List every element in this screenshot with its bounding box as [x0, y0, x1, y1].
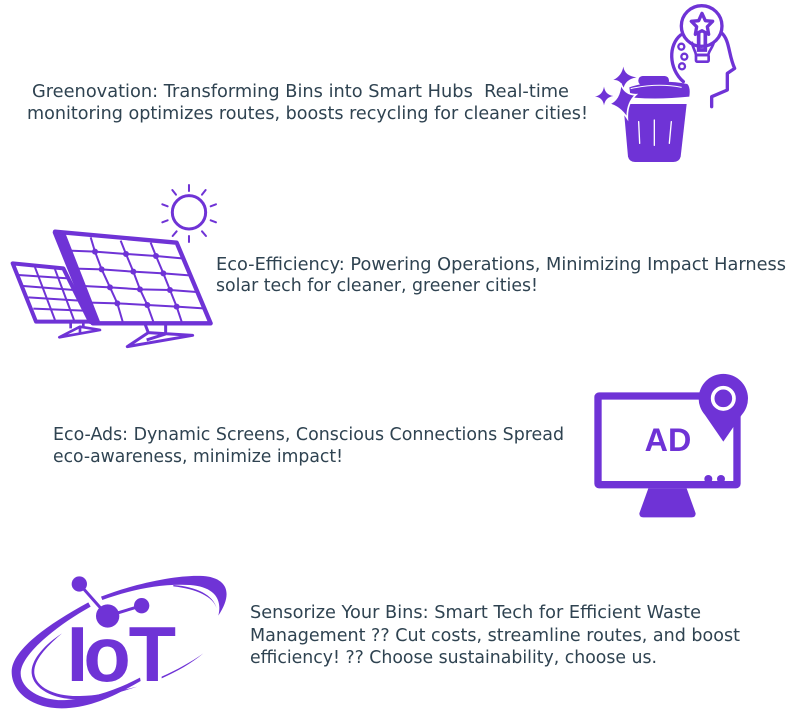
text block: Sensorize Your Bins	[250, 602, 740, 668]
text block: Eco-Efficiency: solar tech for cleaner, greener cities!	[216, 275, 538, 296]
small solar panel	[13, 263, 100, 337]
icon: solar panels and sun	[13, 185, 216, 347]
sun	[162, 185, 216, 242]
icon: ad monitor with location pin	[598, 374, 748, 517]
icon: IoT logo: IoT	[67, 612, 176, 698]
text block: Greenovation	[27, 81, 588, 124]
text block: Eco-Ads: eco-awareness, minimize impact!	[53, 446, 343, 467]
text block: Eco-Efficiency	[216, 254, 786, 296]
text block: Sensorize Your Bins: Management ?? Cut costs, streamline routes, and boost	[250, 625, 740, 646]
icon: IoT logo	[12, 576, 227, 708]
text block: Greenovation: Greenovation: Transforming Bins into Smart Hubs Real-time	[32, 81, 569, 102]
text block: Eco-Ads: Eco-Ads: Dynamic Screens, Conscious Connections Spread	[53, 424, 564, 445]
text block: Sensorize Your Bins: Sensorize Your Bins: Smart Tech for Efficient Waste	[250, 602, 701, 623]
text block: Greenovation: monitoring optimizes routes, boosts recycling for cleaner cities!	[27, 103, 588, 124]
molecule nodes	[72, 576, 149, 628]
text block: Eco-Ads	[53, 424, 564, 467]
text block: Eco-Efficiency: Eco-Efficiency: Powering Operations, Minimizing Impact Harness	[216, 254, 786, 275]
icon: smart bin with lightbulb head	[595, 6, 735, 162]
large solar panel	[53, 232, 211, 347]
icon: ad monitor with location pin: AD	[645, 421, 691, 458]
text block: Sensorize Your Bins: efficiency! ?? Choose sustainability, choose us.	[250, 647, 657, 668]
